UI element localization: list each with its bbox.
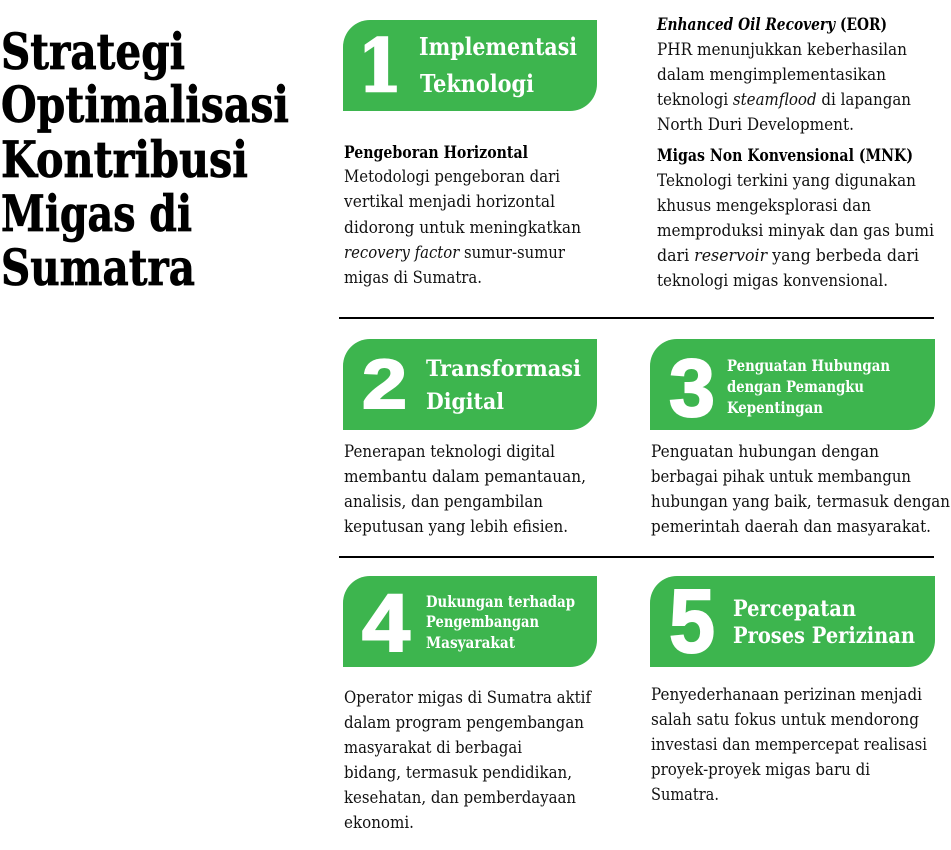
text: Migas Non Konvensional: khusus mengeksplorasi dan xyxy=(657,196,871,215)
text: Pengeboran Horizontal: vertikal menjadi horizontal xyxy=(343,192,555,211)
text: card 3 description: berbagai pihak untuk membangun xyxy=(651,467,911,486)
text: Pengeboran Horizontal: didorong untuk meningkatkan xyxy=(344,218,581,237)
panel: card 2 Transformasi Digital: 2 xyxy=(362,345,407,423)
panel: card 3 Penguatan Hubungan: 3 xyxy=(669,343,715,434)
text: Migas Non Konvensional: Teknologi terkini yang digunakan xyxy=(657,171,916,190)
text: card 4 description: masyarakat di berbagai xyxy=(344,738,522,757)
title xyxy=(1,22,289,297)
text: Pengeboran Horizontal: migas di Sumatra. xyxy=(344,268,482,287)
panel: card 3 Penguatan Hubungan: Penguatan Hubungan xyxy=(727,356,890,375)
text: card 5 description: salah satu fokus untuk mendorong xyxy=(651,710,919,729)
text: card 3 description xyxy=(651,442,950,536)
title: Kontribusi xyxy=(1,130,248,189)
text: card 3 description: Penguatan hubungan dengan xyxy=(651,442,879,461)
text: Enhanced Oil Recovery xyxy=(656,15,911,134)
text: card 5 description: Penyederhanaan perizinan menjadi xyxy=(651,685,922,704)
text: card 2 description xyxy=(344,442,586,536)
panel: card 5 Percepatan: 5 xyxy=(669,572,715,672)
panel: card 4 Dukungan xyxy=(343,576,597,669)
text: card 3 description: pemerintah daerah dan masyarakat. xyxy=(651,517,931,536)
text: Migas Non Konvensional: teknologi migas konvensional. xyxy=(657,271,888,290)
panel: card 4 Dukungan: Pengembangan xyxy=(426,612,539,631)
text: Enhanced Oil Recovery: PHR menunjukkan keberhasilan xyxy=(657,40,907,59)
text: card 4 description: dalam program pengembangan xyxy=(344,713,584,732)
text: Migas Non Konvensional xyxy=(657,146,934,290)
text: Enhanced Oil Recovery: Enhanced Oil Recovery (EOR) xyxy=(656,15,887,34)
text: Enhanced Oil Recovery: North Duri Development. xyxy=(657,115,854,134)
text: card 4 description: ekonomi. xyxy=(344,813,414,832)
panel: card 1 Implementasi Teknologi xyxy=(343,20,597,111)
text: card 5 description: proyek-proyek migas baru di xyxy=(651,760,870,779)
panel: card 2 Transformasi Digital: Transformasi xyxy=(426,356,581,382)
text: Migas Non Konvensional: Migas Non Konvensional (MNK) xyxy=(657,146,913,165)
panel: card 2 Transformasi Digital: Digital xyxy=(426,389,504,415)
text: Pengeboran Horizontal: Metodologi pengeboran dari xyxy=(344,167,560,186)
text: card 5 description: Sumatra. xyxy=(651,785,719,804)
panel: card 1 Implementasi Teknologi: 1 xyxy=(358,23,402,108)
title: Migas di xyxy=(1,184,192,243)
title: Strategi xyxy=(1,22,185,81)
panel: card 2 Transformasi Digital xyxy=(343,339,597,430)
text: Enhanced Oil Recovery: teknologi steamflood di lapangan xyxy=(657,90,911,109)
text: card 4 description xyxy=(344,688,593,832)
text: card 2 description: membantu dalam pemantauan, xyxy=(344,467,586,486)
panel: card 1 Implementasi Teknologi: Implementasi xyxy=(419,32,577,61)
text: card 4 description: Operator migas di Sumatra aktif xyxy=(344,688,593,707)
text: card 2 description: analisis, dan pengambilan xyxy=(344,492,543,511)
title: Optimalisasi xyxy=(1,75,289,134)
text: Migas Non Konvensional: memproduksi minyak dan gas bumi xyxy=(657,221,934,240)
text: card 2 description: Penerapan teknologi digital xyxy=(344,442,555,461)
text: card 5 description xyxy=(651,685,927,804)
panel: card 5 Percepatan xyxy=(650,572,935,672)
panel: card 5 Percepatan: Proses Perizinan xyxy=(733,623,915,649)
panel: card 3 Penguatan Hubungan: dengan Pemangku xyxy=(727,377,864,396)
text: card 5 description: investasi dan mempercepat realisasi xyxy=(651,735,927,754)
panel: card 4 Dukungan: 4 xyxy=(362,578,410,669)
text: Pengeboran Horizontal: recovery factor sumur-sumur xyxy=(344,243,565,262)
text: card 2 description: keputusan yang lebih efisien. xyxy=(344,517,568,536)
panel: card 3 Penguatan Hubungan: Kepentingan xyxy=(727,398,823,417)
text: card 4 description: kesehatan, dan pemberdayaan xyxy=(344,788,576,807)
panel: card 3 Penguatan Hubungan xyxy=(650,339,935,434)
text: Migas Non Konvensional: dari reservoir yang berbeda dari xyxy=(657,246,919,265)
text: Pengeboran Horizontal xyxy=(343,143,581,287)
panel: card 4 Dukungan: Masyarakat xyxy=(426,633,516,652)
panel: card 5 Percepatan: Percepatan xyxy=(733,596,856,622)
text: Enhanced Oil Recovery: dalam mengimplementasikan xyxy=(657,65,886,84)
text: card 4 description: bidang, termasuk pendidikan, xyxy=(344,763,572,782)
text: Pengeboran Horizontal: Pengeboran Horizontal xyxy=(344,143,528,162)
panel: card 4 Dukungan: Dukungan terhadap xyxy=(426,592,575,611)
panel: card 1 Implementasi Teknologi: Teknologi xyxy=(420,69,534,98)
title: Sumatra xyxy=(1,238,195,297)
